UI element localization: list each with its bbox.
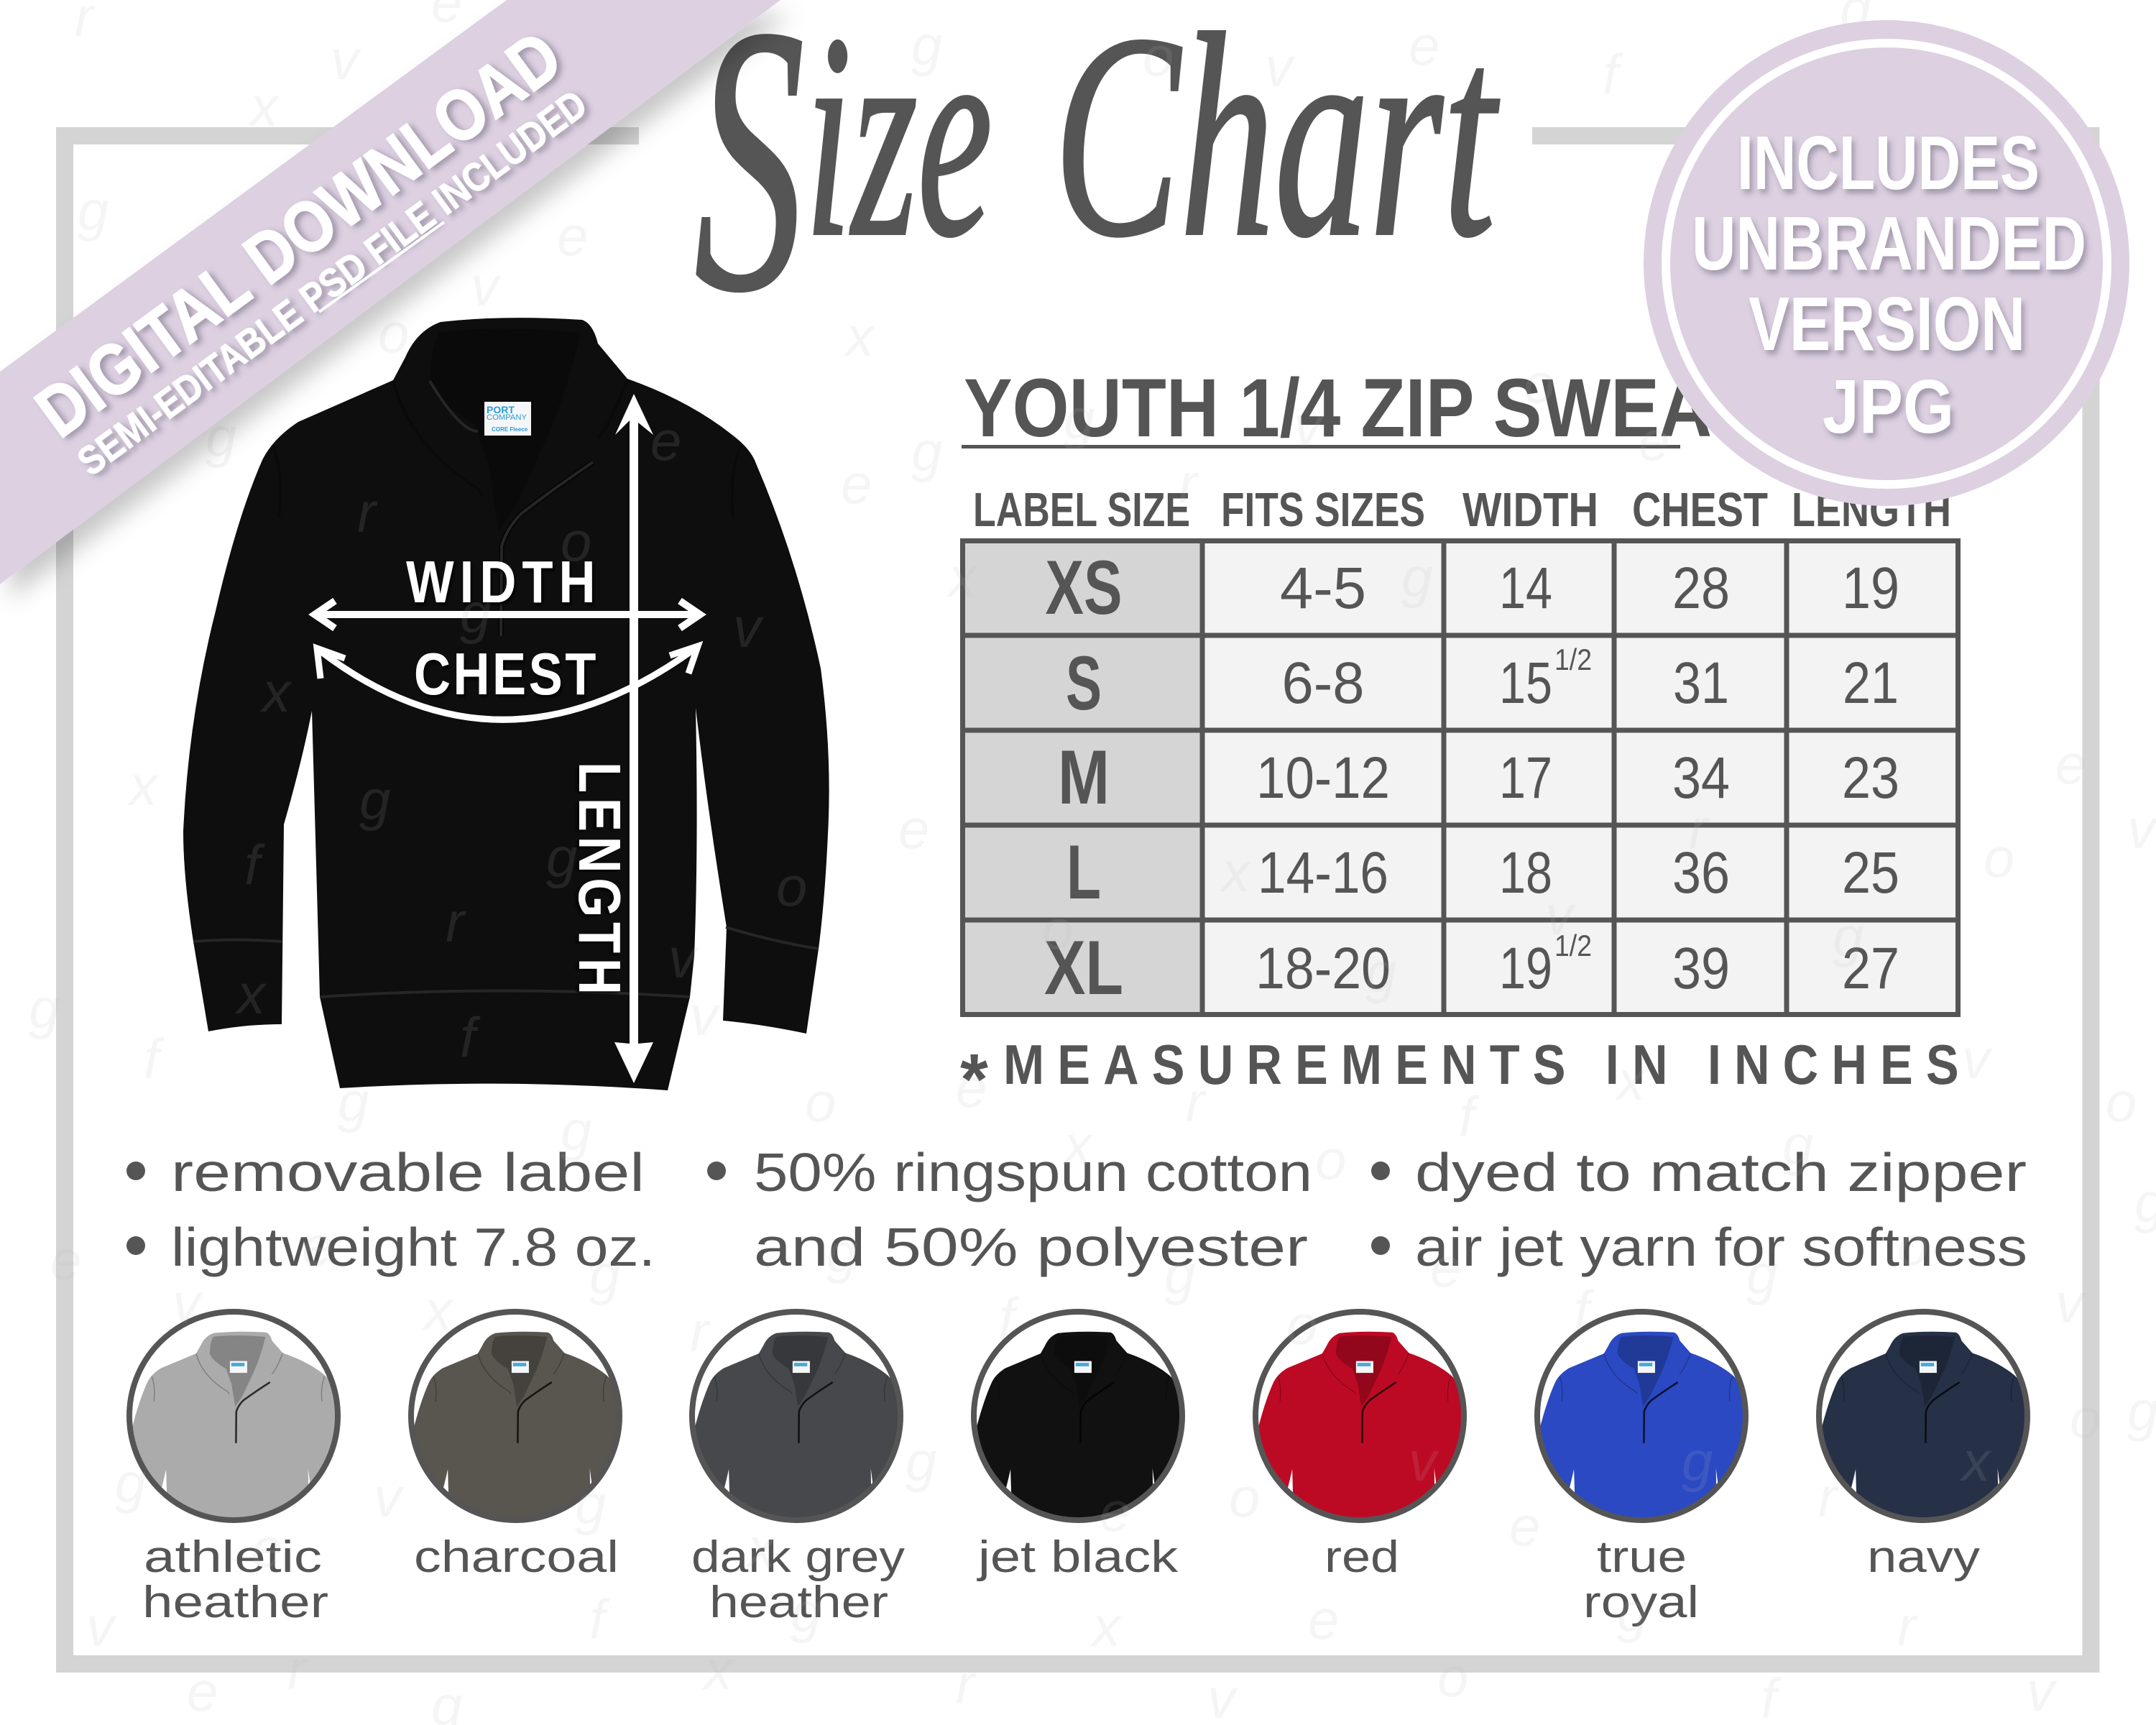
row: XL: 19 bbox=[1499, 936, 1552, 1001]
feature bullets: column 2: 50% ringspun cotton bbox=[754, 1142, 1312, 1202]
row: M: 23 bbox=[1842, 745, 1899, 811]
table column headers: WIDTH bbox=[1462, 483, 1598, 537]
row: S bbox=[1066, 640, 1899, 726]
row: XL: XL bbox=[1044, 924, 1123, 1011]
row: S: 1/2 bbox=[1554, 643, 1592, 676]
swatch: navy bbox=[1816, 1309, 2030, 1581]
faint watermark letters: evexgrgfgoefgovg bbox=[50, 1171, 2156, 1363]
row: M bbox=[1058, 734, 1899, 820]
measurements note: MEASUREMENTS IN INCHES bbox=[1003, 1033, 1959, 1096]
badge text bbox=[1692, 121, 2086, 449]
row: L: L bbox=[1067, 829, 1101, 915]
ribbon: digital download bbox=[0, 0, 780, 584]
feature bullets: column 1 bbox=[126, 1142, 655, 1277]
garment tag: CORE Fleece bbox=[492, 426, 528, 433]
measurements note: * bbox=[960, 1039, 988, 1120]
row: XL: 18-20 bbox=[1256, 936, 1391, 1001]
swatch: dark grey heather: heather bbox=[709, 1578, 888, 1627]
table column headers bbox=[973, 483, 1951, 537]
badge text: JPG bbox=[1823, 364, 1954, 449]
psd file underline bbox=[319, 222, 444, 312]
swatch: charcoal bbox=[408, 1309, 622, 1573]
garment tag bbox=[484, 402, 531, 436]
row: S: 6-8 bbox=[1282, 650, 1364, 716]
swatch: athletic heather bbox=[126, 1309, 341, 1617]
label: chest: CHEST bbox=[414, 641, 596, 707]
swatch: dark grey heather bbox=[689, 1309, 905, 1617]
feature bullets: column 3 bbox=[1371, 1142, 2027, 1277]
faint watermark letters: gevgxgeovegrxog bbox=[115, 1379, 2156, 1579]
row: XL bbox=[1044, 924, 1899, 1011]
row: L: 18 bbox=[1499, 840, 1552, 906]
black quarter-zip sweatshirt bbox=[183, 318, 829, 1090]
title: Size Chart bbox=[694, 0, 1502, 370]
table column headers: FITS SIZES bbox=[1221, 483, 1425, 537]
row: L: 25 bbox=[1842, 840, 1899, 906]
feature bullets: column 3: air jet yarn for softness bbox=[1415, 1217, 2027, 1277]
label: length: LENGTH bbox=[566, 762, 632, 995]
garment tag: PORT bbox=[487, 404, 515, 415]
row: XS: 14 bbox=[1499, 556, 1552, 621]
garment stitching bbox=[193, 381, 819, 997]
row: L: 36 bbox=[1672, 840, 1730, 906]
swatch: charcoal: charcoal bbox=[414, 1532, 619, 1582]
row: XS: 4-5 bbox=[1280, 556, 1366, 621]
cell backgrounds bbox=[960, 538, 1242, 1017]
badge text: VERSION bbox=[1749, 282, 2025, 367]
badge circle bbox=[1644, 20, 2129, 506]
row: S: S bbox=[1066, 640, 1102, 726]
row: S: 15 bbox=[1499, 650, 1552, 716]
swatch: jet black bbox=[971, 1309, 1185, 1581]
table grid bbox=[960, 538, 1961, 1017]
row: L bbox=[1067, 829, 1899, 915]
badge: includes unbranded version jpg bbox=[1644, 20, 2129, 506]
feature bullets: column 1: lightweight 7.8 oz. bbox=[171, 1217, 655, 1277]
width arrow bbox=[315, 601, 700, 628]
row: L: 14-16 bbox=[1258, 840, 1388, 906]
row: XL: 1/2 bbox=[1554, 929, 1592, 962]
faint watermark letters: xrgoevexgrvgoerve bbox=[259, 236, 2115, 724]
heading: youth 1/4 zip sweatshirt: YOUTH 1/4 ZIP SWEATSHIRT bbox=[964, 362, 1970, 454]
feature bullets: column 1: removable label bbox=[171, 1142, 645, 1202]
swatch: athletic heather: athletic bbox=[144, 1532, 322, 1582]
row: M: M bbox=[1058, 734, 1110, 820]
swatch: athletic heather: heather bbox=[142, 1578, 328, 1627]
label: width: WIDTH bbox=[406, 549, 596, 615]
swatch: true royal: true bbox=[1597, 1532, 1687, 1582]
row: XS: 19 bbox=[1842, 556, 1899, 621]
chest arrow bbox=[317, 646, 698, 719]
feature bullets: column 3: dyed to match zipper bbox=[1415, 1142, 2027, 1202]
row: S: 21 bbox=[1843, 650, 1899, 716]
table column headers: CHEST bbox=[1632, 483, 1768, 537]
faint watermark letters: xfgrgvoeoxgvrgoev bbox=[126, 732, 2156, 1004]
swatch: dark grey heather: dark grey bbox=[691, 1532, 905, 1582]
table column headers: LENGTH bbox=[1792, 483, 1951, 537]
measurements note bbox=[960, 1033, 1959, 1120]
swatch: true royal: royal bbox=[1583, 1578, 1699, 1627]
row: XL: 27 bbox=[1842, 936, 1899, 1001]
row: M: 17 bbox=[1499, 745, 1552, 811]
table column headers: LABEL SIZE bbox=[973, 483, 1190, 537]
sweatshirt with measurements bbox=[183, 318, 829, 1090]
feature bullets: column 2 bbox=[707, 1142, 1312, 1277]
swatch: red: red bbox=[1325, 1532, 1399, 1582]
badge text: INCLUDES bbox=[1737, 121, 2040, 206]
row: XS bbox=[1045, 544, 1899, 630]
size table bbox=[960, 538, 1961, 1017]
row: XS: 28 bbox=[1672, 556, 1730, 621]
swatch: red bbox=[1253, 1309, 1467, 1573]
badge ring bbox=[1666, 43, 2107, 484]
garment tag: COMPANY bbox=[487, 413, 528, 422]
row: M: 10-12 bbox=[1256, 745, 1390, 811]
feature bullets: column 2: and 50% polyester bbox=[754, 1217, 1308, 1277]
ribbon band bbox=[0, 0, 780, 584]
ribbon subhead: SEMI-EDITABLE PSD FILE INCLUDED bbox=[69, 81, 595, 484]
row: XS: XS bbox=[1045, 544, 1123, 630]
swatch: navy: navy bbox=[1867, 1532, 1980, 1582]
row: XL: 39 bbox=[1672, 936, 1730, 1001]
row: M: 34 bbox=[1672, 745, 1730, 811]
length arrow bbox=[614, 394, 653, 1083]
row: S: 31 bbox=[1673, 650, 1729, 716]
faint watermark letters: gfxgfgvoexrofxgvo bbox=[29, 962, 2137, 1191]
swatch: true royal bbox=[1526, 1312, 1765, 1627]
swatch: jet black: jet black bbox=[977, 1532, 1179, 1582]
